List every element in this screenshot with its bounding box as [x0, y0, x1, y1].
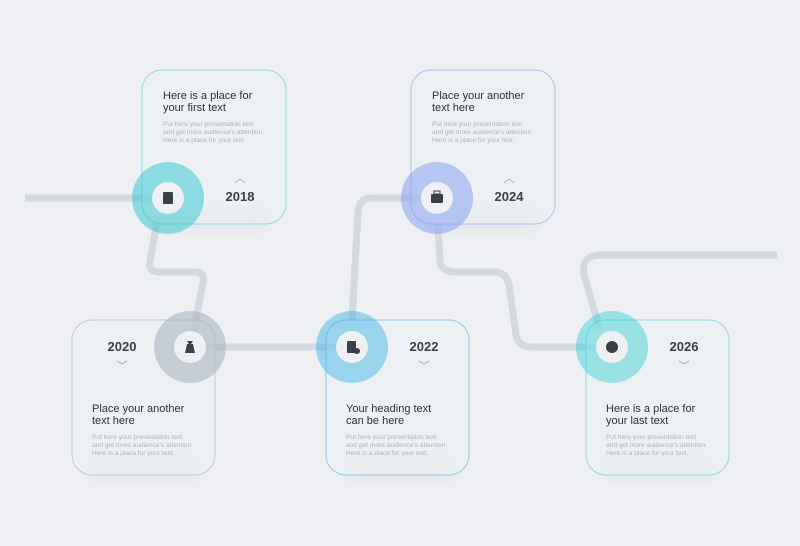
card 2022: 2022 [410, 339, 438, 354]
card 2020: Put here your presentation text [92, 434, 182, 441]
card 2026: Here is a place for [606, 403, 696, 415]
card 2022: Your heading text [346, 403, 431, 415]
card 2024: Place your another [432, 90, 525, 102]
card 2022: can be here [346, 415, 404, 427]
card 2024: text here [432, 102, 475, 114]
card 2018: and get more audience's attention. [163, 129, 264, 136]
card 2024: and get more audience's attention. [432, 129, 533, 136]
card 2018: Here is a place for [163, 90, 253, 102]
card 2020: Place your another [92, 403, 185, 415]
card 2026: Here is a place for your text. [606, 450, 689, 457]
card 2018: Here is a place for your text. [163, 137, 246, 144]
card 2018 [142, 70, 286, 224]
card 2020: and get more audience's attention. [92, 442, 193, 449]
node 2024 [401, 162, 473, 234]
card 2026: Put here your presentation text [606, 434, 696, 441]
node 2018 [132, 162, 204, 234]
card 2022: and get more audience's attention. [346, 442, 447, 449]
card 2022: Put here your presentation text [346, 434, 436, 441]
node 2026 [576, 311, 648, 383]
card 2020: 2020 [108, 339, 136, 354]
card 2026: your last text [606, 415, 668, 427]
card 2020: text here [92, 415, 135, 427]
card 2026 [586, 320, 729, 475]
timeline track [25, 198, 777, 347]
card 2018: Put here your presentation text [163, 121, 253, 128]
card 2018: 2018 [226, 189, 254, 204]
card 2024: Put here your presentation text [432, 121, 522, 128]
card 2024 [411, 70, 555, 224]
card 2022 [326, 320, 469, 475]
card 2024: Here is a place for your text. [432, 137, 515, 144]
node 2020 [154, 311, 226, 383]
card 2020 [72, 320, 215, 475]
node 2022 [316, 311, 388, 383]
card 2026: and get more audience's attention. [606, 442, 707, 449]
card 2018: your first text [163, 102, 226, 114]
card 2020: Here is a place for your text. [92, 450, 175, 457]
card 2024: 2024 [495, 189, 524, 204]
card 2022: Here is a place for your text. [346, 450, 429, 457]
card 2026: 2026 [670, 339, 698, 354]
